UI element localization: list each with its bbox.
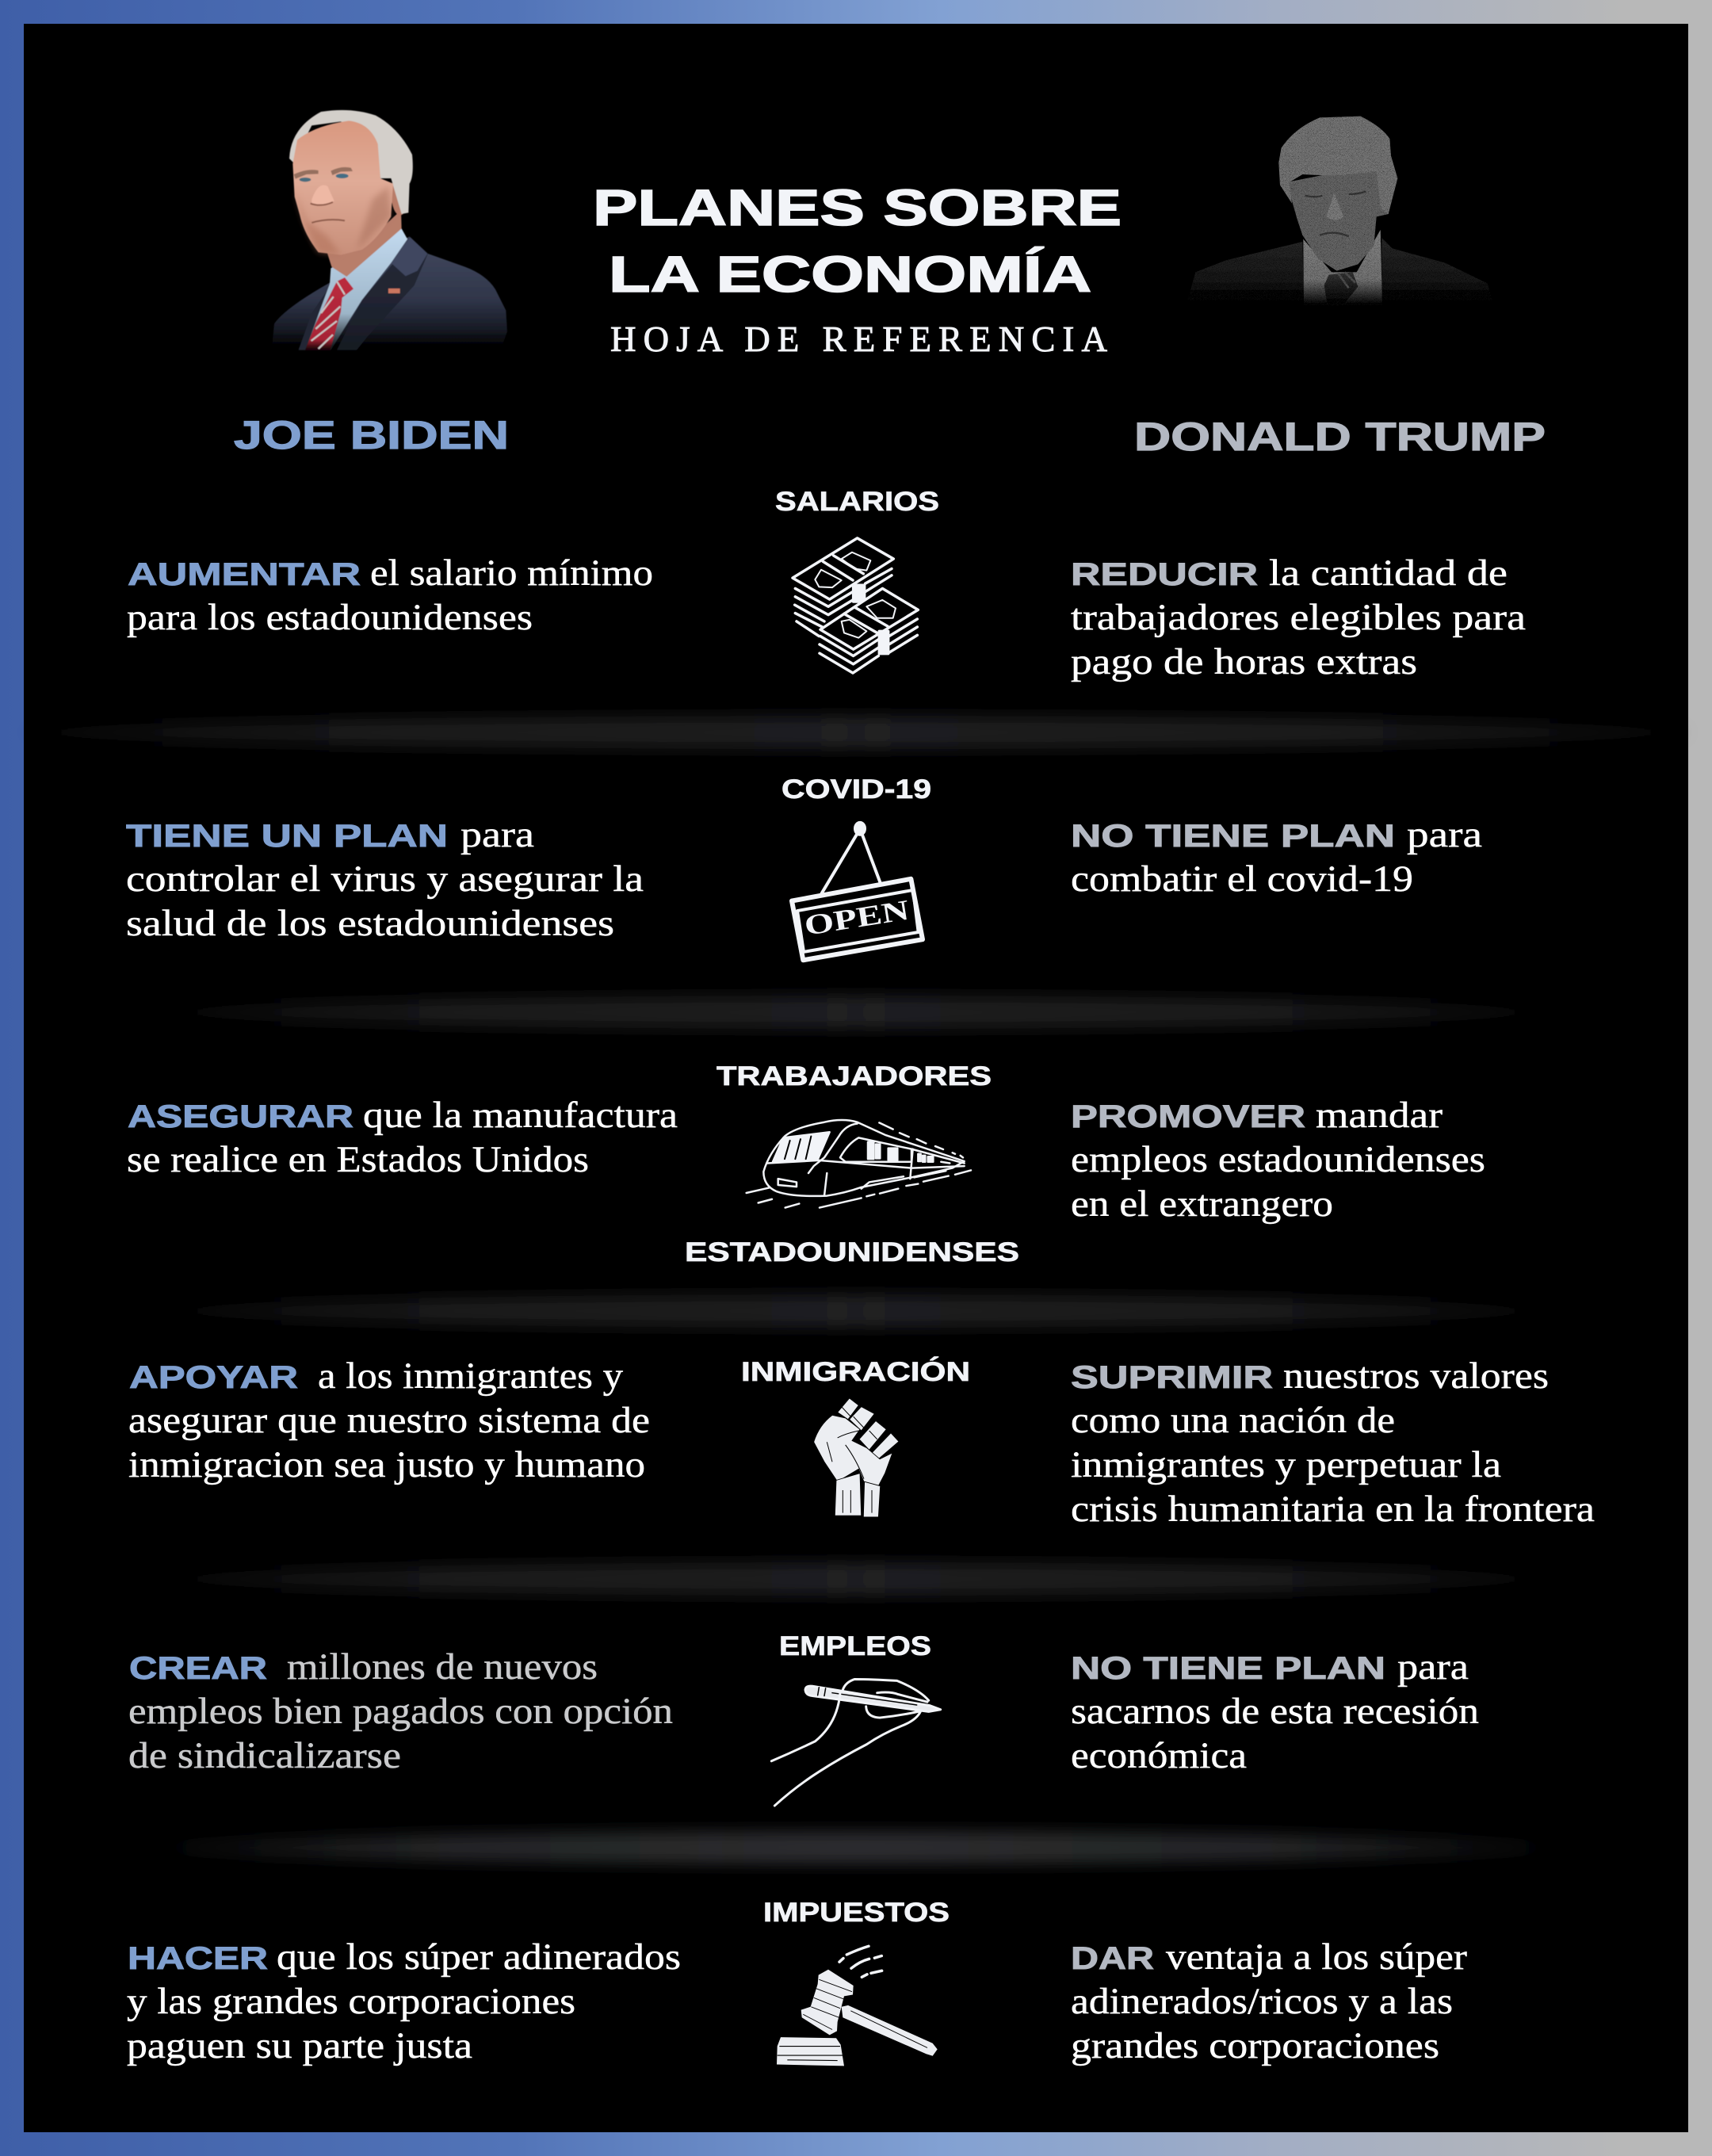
row: salarios, Biden: para los estadounidenses	[127, 597, 533, 638]
row: empleos, Trump: económica	[1071, 1735, 1247, 1776]
row: inmigración, Biden: inmigracion sea justo y humano	[128, 1444, 645, 1485]
category: empleos: EMPLEOS	[779, 1631, 931, 1661]
row: empleos, Biden	[128, 1646, 673, 1776]
row: salarios, Trump: REDUCIR	[1071, 557, 1258, 592]
row: empleos, Trump: NO TIENE PLAN	[1071, 1651, 1385, 1686]
title: PLANES SOBRE	[593, 179, 1122, 236]
row: impuestos, Trump	[1071, 1936, 1467, 2066]
subtitle: HOJA DE REFERENCIA	[610, 319, 1108, 359]
row: empleos, Trump: para	[1397, 1646, 1469, 1688]
row: salarios, Biden: el salario mínimo	[370, 552, 653, 594]
row: inmigración, Trump: SUPRIMIR	[1071, 1360, 1273, 1395]
section dividers	[24, 716, 1688, 1864]
row: empleos, Biden: empleos bien pagados con opción	[128, 1691, 673, 1732]
row: covid, Biden	[126, 814, 644, 944]
row: empleos, Biden: de sindicalizarse	[128, 1735, 401, 1776]
row: inmigración, Biden: asegurar que nuestro sistema de	[128, 1400, 650, 1441]
row: impuestos, Trump: DAR	[1071, 1941, 1154, 1976]
category: trabajadores estadounidenses	[685, 1061, 1019, 1267]
row: inmigración, Biden	[128, 1355, 650, 1485]
category: trabajadores estadounidenses: TRABAJADORES	[717, 1061, 992, 1091]
row: trabajadores, Biden	[127, 1095, 678, 1180]
row: inmigración, Trump: nuestros valores	[1283, 1355, 1549, 1397]
icon: hand with pen	[771, 1679, 941, 1806]
row: impuestos, Biden: que los súper adinerados	[277, 1936, 681, 1978]
row: covid, Trump	[1071, 814, 1482, 900]
category: impuestos: IMPUESTOS	[763, 1898, 950, 1928]
row: trabajadores, Trump: mandar	[1316, 1095, 1443, 1136]
row: impuestos, Biden: paguen su parte justa	[127, 2025, 472, 2066]
row: impuestos, Biden: y las grandes corporaciones	[127, 1981, 575, 2022]
row: covid, Biden: salud de los estadounidenses	[126, 903, 614, 944]
row: salarios, Trump: trabajadores elegibles para	[1071, 597, 1526, 638]
icon: open sign	[792, 823, 923, 960]
row: salarios, Biden	[127, 552, 653, 638]
row: empleos, Trump: sacarnos de esta recesión	[1071, 1691, 1479, 1732]
row: trabajadores, Trump: PROMOVER	[1071, 1099, 1305, 1134]
icon: raised fist	[814, 1398, 899, 1517]
icon: open sign: OPEN	[802, 894, 911, 942]
row: impuestos, Trump: adinerados/ricos y a las	[1071, 1981, 1453, 2022]
row: salarios, Trump: pago de horas extras	[1071, 641, 1417, 682]
row: trabajadores, Trump: empleos estadounidenses	[1071, 1139, 1485, 1180]
row: covid, Trump: NO TIENE PLAN	[1071, 819, 1395, 854]
row: covid, Biden: TIENE UN PLAN	[126, 819, 448, 854]
heading: Donald Trump: DONALD TRUMP	[1134, 415, 1546, 459]
row: salarios, Biden: AUMENTAR	[128, 557, 361, 592]
row: covid, Trump: combatir el covid-19	[1071, 858, 1413, 900]
photo: Joe Biden	[272, 110, 507, 350]
row: impuestos, Biden	[127, 1936, 681, 2066]
row: covid, Trump: para	[1407, 814, 1482, 855]
row: salarios, Trump: la cantidad de	[1269, 552, 1508, 594]
title	[593, 179, 1122, 303]
row: inmigración, Biden: a los inmigrantes y	[318, 1355, 624, 1397]
row: covid, Biden: para	[460, 814, 534, 855]
row: empleos, Biden: CREAR	[129, 1651, 267, 1686]
row: trabajadores, Trump: en el extrangero	[1071, 1183, 1333, 1225]
category: salarios: SALARIOS	[775, 487, 939, 517]
icon: train	[747, 1120, 971, 1208]
row: salarios, Trump	[1071, 552, 1526, 682]
row: covid, Biden: controlar el virus y asegurar la	[126, 858, 644, 900]
row: impuestos, Trump: grandes corporaciones	[1071, 2025, 1439, 2066]
icon: gavel	[777, 1946, 938, 2066]
photo: Donald Trump	[1186, 117, 1494, 307]
row: inmigración, Trump	[1071, 1355, 1595, 1530]
row: impuestos, Biden: HACER	[128, 1941, 268, 1976]
row: inmigración, Trump: inmigrantes y perpetuar la	[1071, 1444, 1501, 1485]
row: inmigración, Trump: crisis humanitaria en la frontera	[1071, 1489, 1595, 1530]
icon: money stacks	[793, 538, 918, 673]
row: trabajadores, Trump	[1071, 1095, 1485, 1225]
category: covid-19: COVID-19	[781, 774, 931, 805]
row: empleos, Trump	[1071, 1646, 1479, 1776]
row: impuestos, Trump: ventaja a los súper	[1166, 1936, 1467, 1978]
row: inmigración, Biden: APOYAR	[129, 1360, 298, 1395]
row: inmigración, Trump: como una nación de	[1071, 1400, 1395, 1441]
row: trabajadores, Biden: ASEGURAR	[128, 1099, 353, 1134]
row: trabajadores, Biden: que la manufactura	[363, 1095, 678, 1136]
category: trabajadores estadounidenses: ESTADOUNIDENSES	[685, 1237, 1019, 1267]
row: empleos, Biden: millones de nuevos	[287, 1646, 598, 1688]
category: inmigración: INMIGRACIÓN	[741, 1357, 970, 1387]
heading: Joe Biden: JOE BIDEN	[234, 413, 509, 457]
row: trabajadores, Biden: se realice en Estados Unidos	[127, 1139, 589, 1180]
title: LA ECONOMÍA	[609, 246, 1091, 303]
